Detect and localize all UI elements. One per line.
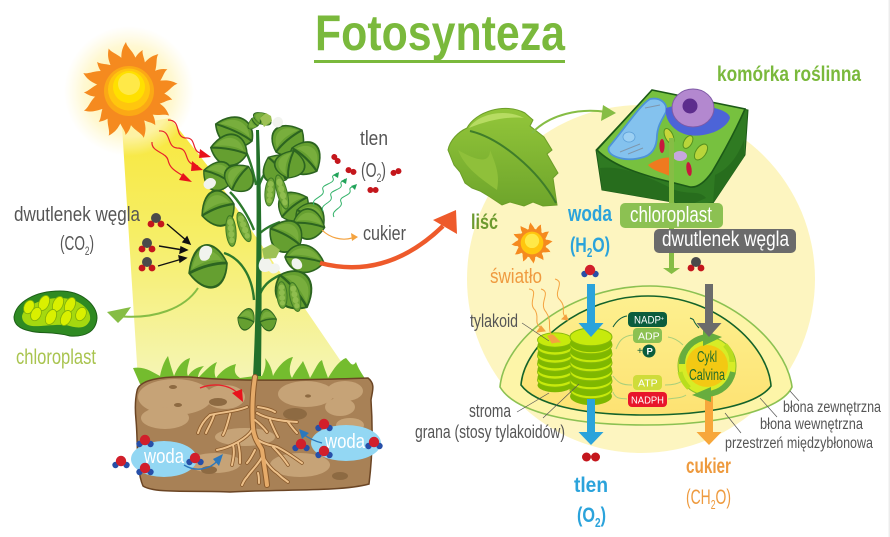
label: oxygen: 2 bbox=[377, 171, 382, 185]
arrow: chloroplast down bbox=[663, 138, 680, 274]
title: Fotosynteza bbox=[315, 5, 566, 61]
pill: ATP: ATP bbox=[638, 378, 658, 390]
arrow: carbon dioxide bbox=[696, 284, 722, 337]
icon: small sun bbox=[511, 222, 553, 264]
label: light: światło bbox=[490, 266, 542, 288]
Calvin cycle: Cykl bbox=[697, 349, 717, 366]
label: oxygen bbox=[360, 128, 388, 185]
pill: ATP bbox=[633, 375, 662, 390]
icon: large leaf bbox=[448, 108, 558, 206]
icon: carbon dioxide molecule bbox=[688, 257, 704, 271]
cell top bbox=[597, 90, 745, 187]
pill: ADP bbox=[633, 328, 662, 343]
plant bbox=[183, 108, 332, 377]
label: water formula: woda bbox=[567, 201, 613, 226]
water right: woda bbox=[324, 431, 366, 453]
soil bbox=[135, 377, 373, 492]
label: sugar output bbox=[686, 455, 731, 512]
plant branches bbox=[224, 148, 280, 300]
outer membrane bbox=[500, 286, 792, 425]
label: leaf: liść bbox=[471, 211, 498, 234]
label: intermembrane space bbox=[725, 413, 873, 452]
label: carbon dioxide: dwutlenek węgla bbox=[14, 204, 141, 226]
label: oxygen output: 2 bbox=[595, 515, 601, 530]
water right bbox=[292, 419, 383, 461]
pill: NADPH bbox=[628, 392, 667, 407]
water left bbox=[112, 435, 223, 477]
label: chloroplast: chloroplast bbox=[16, 346, 96, 369]
panel: pale yellow circle bbox=[467, 105, 815, 453]
pill: NADP+: NADP bbox=[634, 314, 665, 326]
label: carbon dioxide: ) bbox=[89, 233, 94, 255]
arrow: oxygen top bbox=[578, 284, 604, 337]
label: sugar: cukier bbox=[363, 223, 406, 245]
organelles bbox=[662, 127, 676, 145]
panel: light beam bbox=[122, 118, 362, 380]
label: outer membrane bbox=[783, 391, 881, 416]
cell body bbox=[596, 90, 748, 205]
icon: water molecule bbox=[581, 265, 599, 277]
pill: NADPH: NADPH bbox=[631, 396, 664, 406]
nucleus bbox=[672, 89, 714, 127]
icon: phosphate bbox=[637, 344, 656, 358]
label: oxygen: tlen bbox=[360, 128, 388, 150]
label: inner membrane: błona wewnętrzna bbox=[760, 416, 863, 433]
label: oxygen output: tlen bbox=[574, 474, 608, 497]
label: stroma: stroma bbox=[469, 401, 512, 421]
label: oxygen output bbox=[574, 474, 608, 530]
icon: plant cell bbox=[596, 89, 748, 205]
thylakoid stack right bbox=[570, 328, 612, 405]
label: sugar output: cukier bbox=[686, 455, 731, 478]
label: sugar output: (CH bbox=[686, 486, 723, 509]
arrow: red in soil bbox=[200, 385, 243, 402]
Calvin cycle: Calvina bbox=[689, 367, 725, 384]
label: plant cell: komórka roślinna bbox=[717, 63, 861, 86]
label: oxygen output: ) bbox=[601, 504, 606, 527]
pill: NADP+ bbox=[628, 312, 667, 327]
label: carbon dioxide pill: dwutlenek węgla bbox=[662, 228, 789, 251]
label: thylakoid: tylakoid bbox=[470, 311, 518, 331]
label: grana bbox=[415, 384, 579, 442]
water left: woda bbox=[143, 446, 185, 468]
grass bbox=[133, 356, 366, 384]
icon: phosphate: + bbox=[637, 346, 643, 357]
light rays bbox=[529, 279, 568, 343]
label: carbon dioxide bbox=[14, 204, 141, 258]
pill: ADP: ADP bbox=[638, 330, 660, 342]
chloroplast diagram bbox=[500, 279, 792, 445]
thylakoid stack left bbox=[538, 333, 572, 392]
page edge bbox=[888, 0, 890, 537]
arrows: green oxygen bbox=[313, 172, 357, 217]
icon: chloroplast small bbox=[14, 291, 97, 336]
label: oxygen: (O bbox=[361, 160, 383, 182]
icons: oxygen molecules bbox=[330, 153, 402, 193]
label: carbon dioxide: (CO bbox=[60, 233, 97, 255]
endoplasmic reticulum bbox=[666, 105, 730, 136]
label: stroma bbox=[469, 393, 549, 421]
arrow: leaf to chloroplast bbox=[107, 288, 198, 323]
icons: carbon dioxide molecules and arrows bbox=[139, 213, 190, 271]
label: thylakoid bbox=[470, 311, 549, 341]
icon: phosphate: P bbox=[646, 346, 654, 358]
label: water formula: (H bbox=[570, 234, 592, 257]
icon: oxygen output bbox=[582, 452, 600, 462]
label: sugar output: 2 bbox=[711, 497, 716, 512]
label: water formula: O) bbox=[592, 234, 610, 257]
thin arrows bbox=[613, 316, 699, 399]
label: oxygen output: (O bbox=[577, 504, 600, 527]
label: chloroplast pill: chloroplast bbox=[630, 202, 712, 227]
label: grana: grana (stosy tylakoidów) bbox=[415, 422, 565, 442]
roots bbox=[198, 377, 302, 485]
inner membrane bbox=[521, 296, 771, 415]
plant stem bbox=[253, 130, 262, 377]
arrow: oxygen bottom bbox=[578, 399, 604, 445]
label: water formula bbox=[567, 201, 613, 260]
label: water formula: 2 bbox=[587, 245, 592, 260]
icon: sun bbox=[64, 26, 194, 156]
plant pods bbox=[225, 174, 303, 312]
label: sugar output: O) bbox=[716, 486, 731, 509]
arrow: sugar bbox=[322, 230, 358, 241]
label: inner membrane bbox=[760, 398, 863, 433]
plant leaves bbox=[183, 108, 332, 332]
arrow: plant to leaf bbox=[320, 210, 457, 267]
Calvin cycle bbox=[678, 330, 736, 402]
arrow: sugar down bbox=[696, 393, 722, 445]
vacuole bbox=[608, 99, 666, 159]
label: carbon dioxide: 2 bbox=[85, 244, 90, 258]
arrows: red sunlight bbox=[152, 120, 211, 182]
plant flowers bbox=[199, 113, 302, 273]
label: oxygen: ) bbox=[381, 160, 386, 182]
arrow: leaf to cell bbox=[532, 105, 616, 133]
pill: NADP+: + bbox=[661, 316, 664, 322]
